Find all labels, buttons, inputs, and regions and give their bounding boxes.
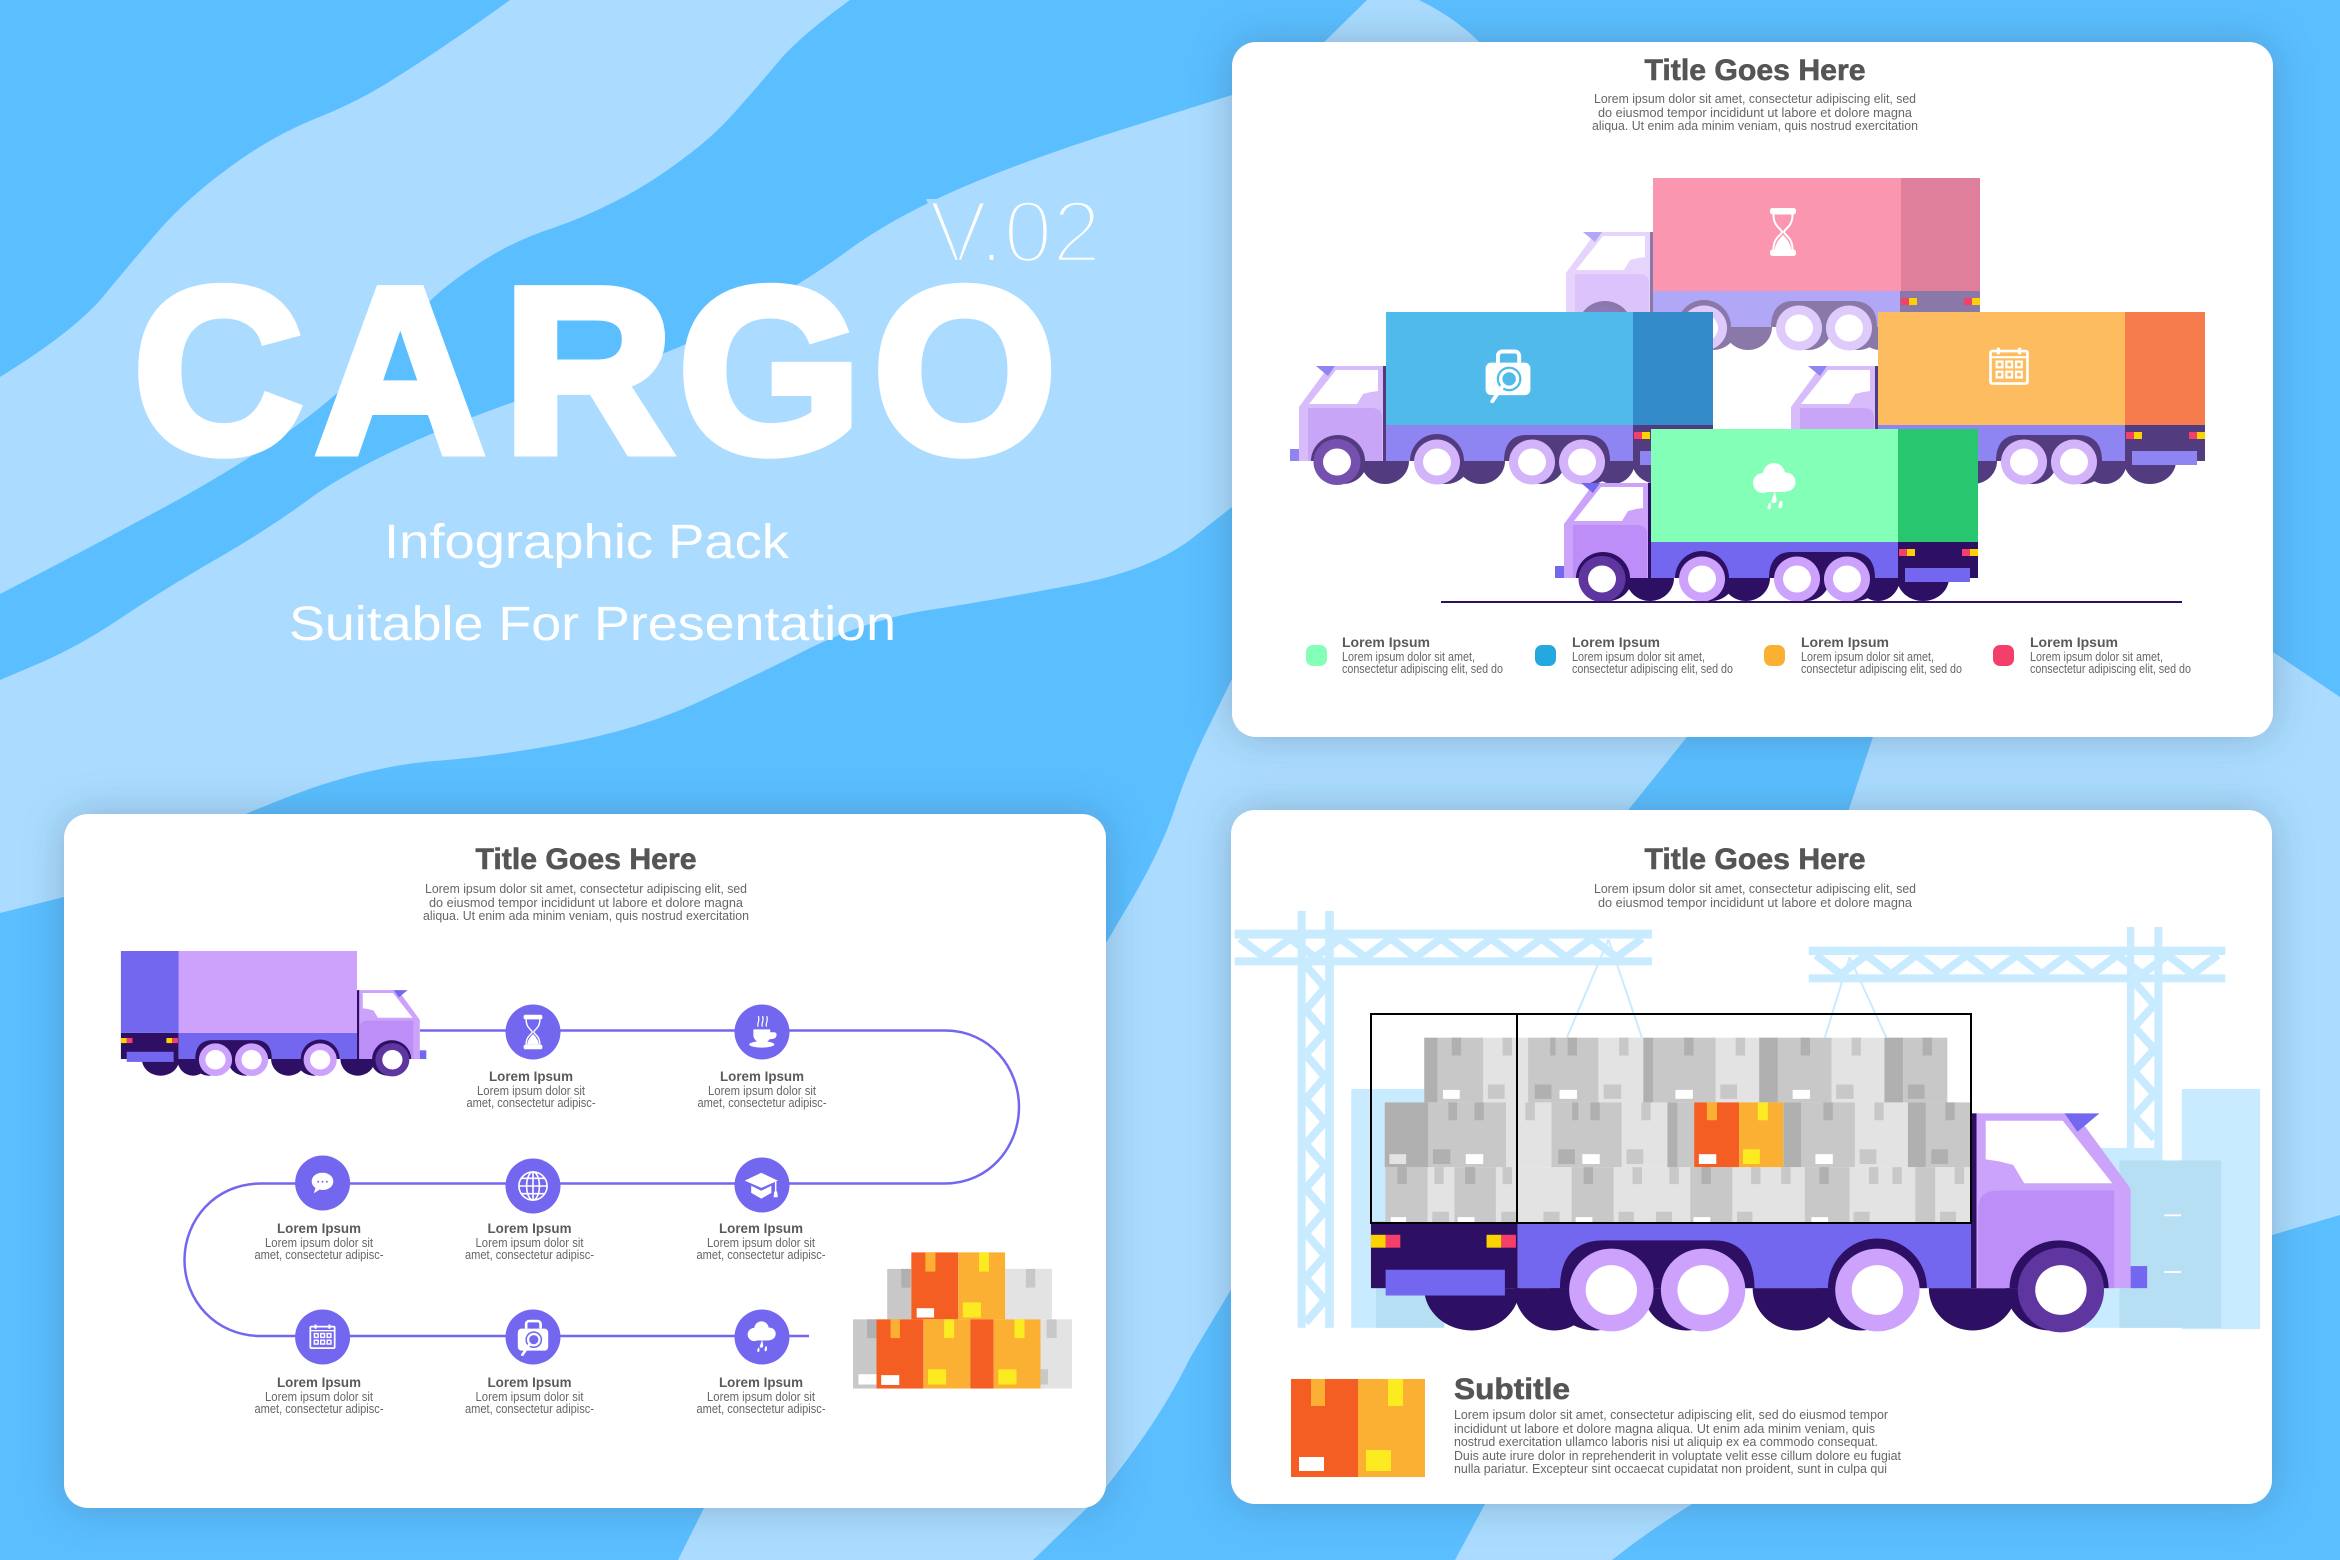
step: camera search: Lorem ipsum dolor sit: [476, 1390, 584, 1404]
legend item 1: Lorem ipsum dolor sit amet,: [1342, 650, 1475, 664]
subtitle paragraph: nulla pariatur. Excepteur sint occaecat cupidatat non proident, sunt in culpa qui: [1454, 1462, 1887, 1476]
step: coffee: Lorem ipsum dolor sit: [708, 1084, 816, 1098]
step: coffee: amet, consectetur adipisc-: [698, 1096, 826, 1110]
step: hourglass: amet, consectetur adipisc-: [466, 1096, 596, 1110]
subtitle line 1: Infographic Pack: [384, 516, 790, 569]
truck: orange: [1782, 312, 2205, 485]
panel: four color trucks: [1232, 42, 2273, 737]
legend item 2: Lorem ipsum dolor sit amet,: [1572, 650, 1705, 664]
subtitle line 2: Suitable For Presentation: [289, 598, 896, 651]
intro text: aliqua. Ut enim ada minim veniam, quis nostrud exercitation: [1592, 118, 1918, 133]
legend item 2: Lorem Ipsum: [1572, 634, 1660, 650]
cranes and buildings backdrop: [1235, 911, 2260, 1329]
panel: route timeline: [64, 814, 1106, 1508]
legend item 3: consectetur adipiscing elit, sed do: [1801, 662, 1962, 676]
step: cloud: [696, 1310, 826, 1416]
step: calendar: Lorem ipsum dolor sit: [265, 1390, 373, 1404]
intro text: do eiusmod tempor incididunt ut labore et dolore magna: [429, 895, 744, 910]
truck: pink: [1557, 178, 1980, 351]
legend item 4: [1993, 634, 2191, 676]
cargo box outline: [1371, 1014, 1971, 1223]
heading: Title Goes Here: [1644, 843, 1866, 876]
step: chat: [254, 1156, 384, 1262]
subtitle heading: Subtitle: [1454, 1373, 1570, 1406]
intro text: [1592, 91, 1918, 133]
intro text: Lorem ipsum dolor sit amet, consectetur adipiscing elit, sed: [1594, 881, 1916, 896]
truck: big chassis: [1371, 1113, 2147, 1332]
main title: CARGO: CARGO: [133, 239, 1057, 503]
step: hourglass: Lorem Ipsum: [489, 1068, 573, 1084]
truck: green: [1555, 429, 1978, 602]
step: camera search: amet, consectetur adipisc-: [465, 1402, 594, 1416]
step: hourglass: [466, 1004, 596, 1110]
step: calendar: [254, 1310, 384, 1416]
legend item 4: Lorem Ipsum: [2030, 634, 2118, 650]
heading: Title Goes Here: [476, 843, 696, 876]
step: globe: Lorem ipsum dolor sit: [476, 1236, 584, 1250]
step: graduation cap: Lorem Ipsum: [719, 1220, 803, 1236]
panel: loaded truck detail: [1231, 810, 2272, 1504]
step: globe: [465, 1158, 594, 1262]
step: chat: Lorem ipsum dolor sit: [265, 1236, 373, 1250]
step: globe: Lorem Ipsum: [488, 1220, 572, 1236]
step: camera search: Lorem Ipsum: [488, 1374, 572, 1390]
intro text: do eiusmod tempor incididunt ut labore et dolore magna: [1598, 105, 1913, 120]
intro text: do eiusmod tempor incididunt ut labore et dolore magna: [1598, 895, 1913, 910]
legend item 3: Lorem Ipsum: [1801, 634, 1889, 650]
step: coffee: Lorem Ipsum: [720, 1068, 804, 1084]
legend item 2: [1535, 634, 1733, 676]
step: cloud: Lorem ipsum dolor sit: [707, 1390, 815, 1404]
subtitle paragraph: Duis aute irure dolor in reprehenderit in voluptate velit esse cillum dolore eu fugiat: [1454, 1449, 1902, 1463]
intro text: [423, 881, 749, 923]
subtitle paragraph: incididunt ut labore et dolore magna aliqua. Ut enim ada minim veniam, quis: [1454, 1422, 1875, 1436]
step: cloud: amet, consectetur adipisc-: [696, 1402, 826, 1416]
truck: blue: [1290, 312, 1713, 485]
subtitle box icon: [1291, 1379, 1425, 1477]
step: camera search: [465, 1310, 594, 1416]
step: coffee: [698, 1004, 826, 1110]
legend item 1: consectetur adipiscing elit, sed do: [1342, 662, 1503, 676]
legend item 1: [1306, 634, 1503, 676]
intro text: aliqua. Ut enim ada minim veniam, quis nostrud exercitation: [423, 908, 749, 923]
step: graduation cap: amet, consectetur adipisc-: [696, 1248, 826, 1262]
cargo box stack: [853, 1252, 1072, 1389]
highlighted orange box: [1694, 1102, 1783, 1167]
step: globe: amet, consectetur adipisc-: [465, 1248, 594, 1262]
step: calendar: amet, consectetur adipisc-: [254, 1402, 384, 1416]
step: calendar: Lorem Ipsum: [277, 1374, 361, 1390]
cargo load: [1385, 1038, 1971, 1223]
subtitle paragraph: nostrud exercitation ullamco laboris nisi ut aliquip ex ea commodo consequat.: [1454, 1435, 1878, 1449]
step: cloud: Lorem Ipsum: [719, 1374, 803, 1390]
subtitle paragraph: [1454, 1408, 1902, 1476]
route line: [184, 1030, 1019, 1336]
step: graduation cap: [696, 1158, 826, 1262]
step: graduation cap: Lorem ipsum dolor sit: [707, 1236, 815, 1250]
legend item 1: Lorem Ipsum: [1342, 634, 1430, 650]
version label: V.02: [929, 182, 1101, 281]
intro text: [1594, 881, 1916, 910]
legend item 4: Lorem ipsum dolor sit amet,: [2030, 650, 2163, 664]
heading: Title Goes Here: [1644, 54, 1866, 87]
step: hourglass: Lorem ipsum dolor sit: [477, 1084, 585, 1098]
intro text: Lorem ipsum dolor sit amet, consectetur adipiscing elit, sed: [1594, 91, 1916, 106]
step: chat: Lorem Ipsum: [277, 1220, 361, 1236]
legend item 3: [1764, 634, 1962, 676]
legend item 3: Lorem ipsum dolor sit amet,: [1801, 650, 1934, 664]
step: chat: amet, consectetur adipisc-: [254, 1248, 384, 1262]
subtitle paragraph: Lorem ipsum dolor sit amet, consectetur adipiscing elit, sed do eiusmod tempor: [1454, 1408, 1888, 1422]
ground line: [1441, 601, 2182, 603]
intro text: Lorem ipsum dolor sit amet, consectetur adipiscing elit, sed: [425, 881, 747, 896]
truck: lilac: [121, 951, 426, 1076]
legend item 2: consectetur adipiscing elit, sed do: [1572, 662, 1733, 676]
legend item 4: consectetur adipiscing elit, sed do: [2030, 662, 2191, 676]
